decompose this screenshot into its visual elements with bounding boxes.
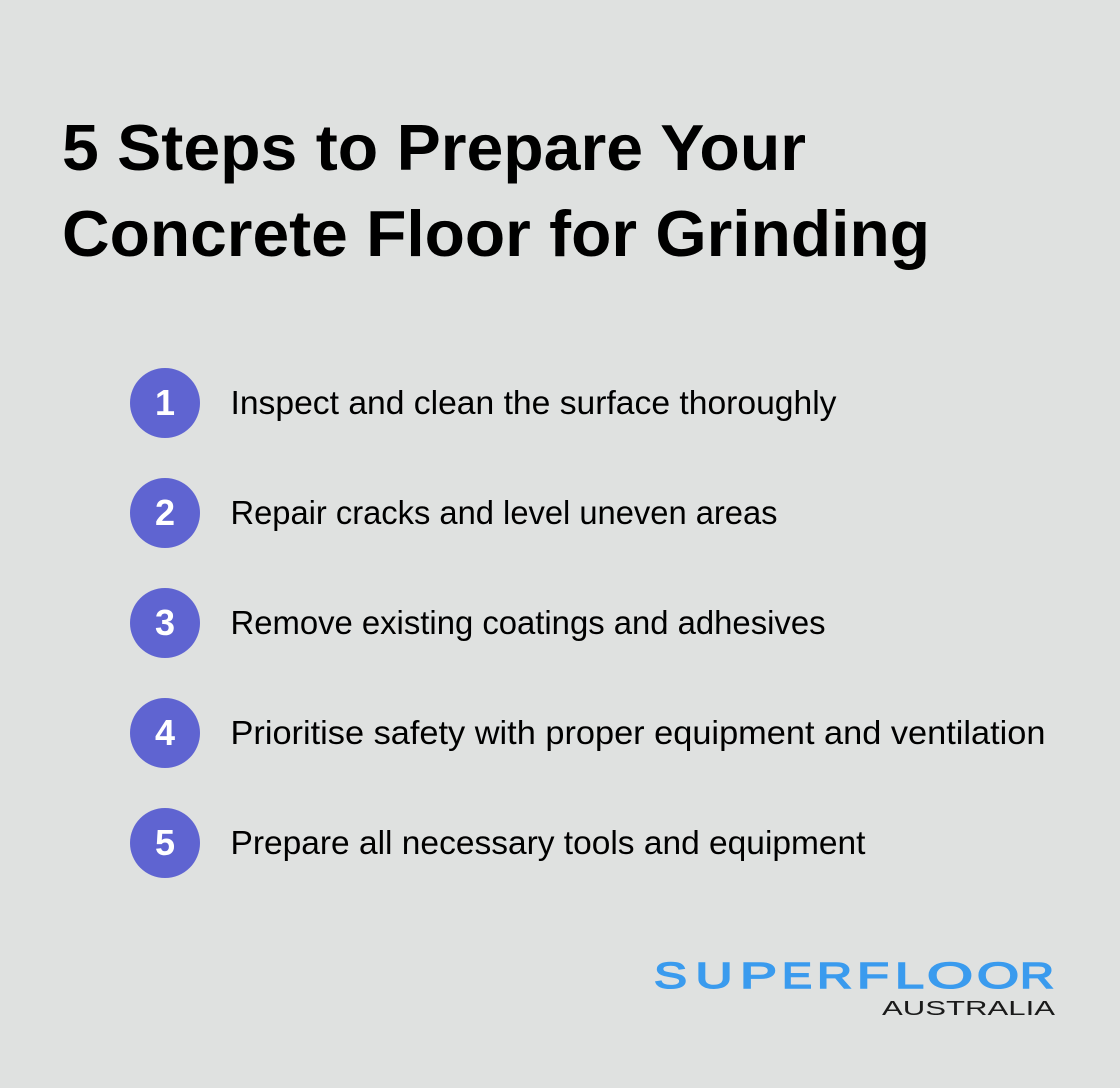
step 1: Inspect and clean the surface thoroughly: [230, 384, 837, 421]
step 4: Prioritise safety with proper equipment and ventilation: [230, 714, 1046, 751]
step 5: 5: [155, 822, 175, 863]
step 1: 1: [155, 382, 175, 423]
logo: Superfloor Australia: F: [857, 955, 889, 996]
step 3: [130, 588, 826, 658]
logo: Superfloor Australia: R: [1020, 955, 1054, 996]
logo: Superfloor Australia: O: [927, 955, 973, 996]
logo: Superfloor Australia: P: [740, 955, 777, 996]
logo: Superfloor Australia: R: [817, 955, 852, 996]
step 5: Prepare all necessary tools and equipment: [230, 824, 866, 861]
step 3: Remove existing coatings and adhesives: [230, 604, 826, 641]
logo: Superfloor Australia: AUSTRALIA: [882, 998, 1056, 1020]
title: 5 Steps to Prepare Your: [62, 111, 806, 184]
step 4: 4: [155, 712, 175, 753]
step 4: [130, 698, 1046, 768]
logo: Superfloor Australia: [654, 955, 1056, 1020]
step 1: [130, 368, 837, 438]
step 5: [130, 808, 866, 878]
step 2: Repair cracks and level uneven areas: [230, 494, 778, 531]
step 3: 3: [155, 602, 175, 643]
logo: Superfloor Australia: E: [782, 955, 812, 996]
title: [62, 111, 930, 270]
step 2: 2: [155, 492, 175, 533]
logo: Superfloor Australia: S: [654, 955, 687, 996]
title: Concrete Floor for Grinding: [62, 197, 930, 270]
step 2: [130, 478, 778, 548]
logo: Superfloor Australia: U: [696, 955, 732, 996]
logo: Superfloor Australia: L: [895, 955, 924, 996]
logo: Superfloor Australia: O: [977, 955, 1019, 996]
